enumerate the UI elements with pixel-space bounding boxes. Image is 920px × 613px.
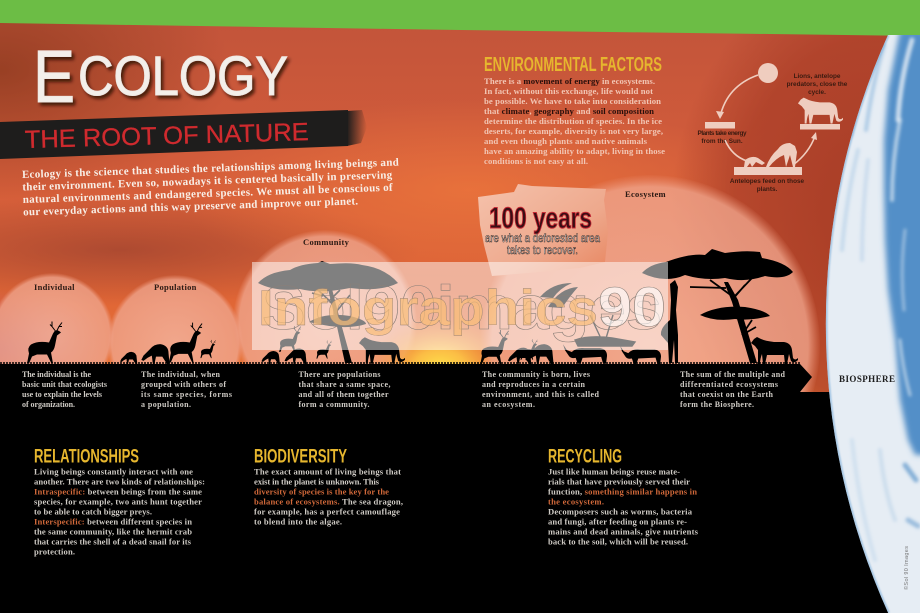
- population text: its same species, forms: [141, 390, 232, 399]
- caption: predators: cycle.: [808, 89, 826, 96]
- subtitle brush band: [0, 110, 367, 159]
- arrow: antelopes to predators: [793, 132, 817, 165]
- biosphere text: The sum of the multiple and: [680, 370, 786, 379]
- relationships text: protection.: [34, 546, 75, 556]
- recycling text: rials that have previously served their: [548, 476, 690, 486]
- image credit: ©Sol 90 Images: [903, 546, 910, 590]
- relationships text: species, for example, two ants hunt together: [34, 496, 202, 506]
- subtitle: THE ROOT OF NATURE: [24, 118, 309, 154]
- environmental factors text: deserts, for example, diversity is not very large,: [484, 126, 663, 136]
- recycling text: Just like human beings reuse mate-: [548, 466, 680, 476]
- individual text: The individual is the: [22, 370, 91, 379]
- biodiversity text: The exact amount of living beings that: [254, 466, 401, 476]
- individual label: Individual: [34, 282, 75, 292]
- recycling text: mains and dead animals, give nutrients: [548, 526, 699, 536]
- intro paragraph: their environment. Even so, nowadays it is centered basically in preserving: [22, 169, 393, 193]
- population text: a population.: [141, 400, 191, 409]
- recycling section: [548, 446, 699, 546]
- population text: [141, 370, 232, 409]
- ocean: [884, 30, 920, 455]
- title: E: [33, 35, 75, 118]
- environmental factors text: that climate, geography and soil composition: [484, 106, 654, 116]
- relationships text: Intraspecific: between beings from the same: [34, 486, 202, 496]
- intro paragraph: [22, 157, 400, 218]
- biodiversity text: balance of ecosystems. The sea dragon,: [254, 496, 403, 506]
- callout: 100 years note: [478, 184, 608, 276]
- individual text: [22, 370, 107, 409]
- arrow: plants to antelopes: [725, 140, 747, 161]
- relationships section: [34, 446, 205, 556]
- recycling text: back to the soil, which will be reused.: [548, 536, 688, 546]
- callout text: [485, 231, 600, 257]
- environmental factors text: have an amazing ability to adapt, living in those: [484, 146, 665, 156]
- silhouettes: individual deer: [27, 322, 62, 364]
- environmental factors text: be possible. We have to take into consideration: [484, 96, 661, 106]
- caption: plants: Plants take energy: [698, 130, 747, 137]
- cloud streaks: [842, 40, 918, 560]
- heading: environmental factors: ENVIRONMENTAL FACTORS: [484, 54, 662, 76]
- silhouette: giraffe: [661, 280, 678, 363]
- earth: [820, 30, 920, 613]
- intro paragraph: natural environments and endangered species. We must all be conscious of: [23, 182, 393, 206]
- sky shading: [0, 0, 920, 480]
- heading: recycling: RECYCLING: [548, 446, 622, 468]
- watermark: Sol90images: [262, 274, 662, 343]
- callout text: are what a deforested area: [485, 231, 600, 245]
- recycling text: [548, 466, 699, 546]
- relationships text: another. There are two kinds of relationships:: [34, 476, 205, 486]
- community text: [298, 370, 390, 409]
- biodiversity section: [254, 446, 403, 526]
- ecosystem label: Ecosystem: [625, 189, 666, 199]
- relationships text: Interspecific: between different species in: [34, 516, 192, 526]
- biodiversity text: [254, 466, 403, 526]
- recycling text: the ecosystem.: [548, 496, 604, 506]
- silhouettes: population: [120, 323, 216, 364]
- community text: and all of them together: [298, 390, 389, 399]
- biosphere text: [680, 370, 786, 409]
- callout text: takes to recover.: [507, 243, 578, 257]
- environmental factors panel: [484, 54, 665, 166]
- ecosystem text: [482, 370, 600, 409]
- relationships text: [34, 466, 205, 556]
- energy cycle diagram: [698, 63, 848, 193]
- community label: Community: [303, 237, 350, 247]
- individual text: use to explain the levels: [22, 390, 102, 399]
- biosphere label: BIOSPHERE: [839, 374, 895, 384]
- caption: predators: predators, close the: [787, 81, 848, 88]
- biodiversity text: exist in the planet is unknown. This: [254, 476, 380, 486]
- caption: predators: Lions, antelope: [794, 73, 841, 80]
- callout number: 100 years: [489, 202, 592, 235]
- biodiversity text: diversity of species is the key for the: [254, 486, 389, 496]
- ecosystem text: The community is born, lives: [482, 370, 590, 379]
- arrow: sun to plants: [716, 75, 758, 119]
- environmental factors text: conditions is not easy at all.: [484, 156, 588, 166]
- ecosystem text: an ecosystem.: [482, 400, 535, 409]
- population label: Population: [154, 282, 197, 292]
- community text: that share a same space,: [298, 380, 390, 389]
- intro paragraph: Ecology is the science that studies the relationships among living beings and: [22, 157, 399, 181]
- biosphere text: that coexist on the Earth: [680, 390, 774, 399]
- biodiversity text: to blend into the algae.: [254, 516, 342, 526]
- biosphere text: differentiated ecosystems: [680, 380, 778, 389]
- icon: cheetah on plate: [798, 98, 843, 130]
- environmental factors text: and even though plants and native animals: [484, 136, 648, 146]
- green top band: [0, 0, 920, 36]
- caption: plants: from the Sun.: [701, 138, 743, 145]
- atmosphere rim: [826, 35, 888, 613]
- environmental factors text: There is a movement of energy in ecosystems.: [484, 76, 655, 86]
- population text: The individual, when: [141, 370, 221, 379]
- circle: individual: [0, 273, 114, 397]
- ecosystem text: environment, and this is called: [482, 390, 600, 399]
- relationships text: that carries the shell of a dead snail for its: [34, 536, 192, 546]
- title: COLOGY: [78, 44, 288, 107]
- sky background: [0, 0, 920, 400]
- icon: sun: [758, 63, 778, 83]
- plate: plants: [705, 122, 735, 128]
- biosphere text: form the Biosphere.: [680, 400, 754, 409]
- environmental factors text: determine the distribution of species. In the ice: [484, 116, 662, 126]
- biodiversity text: for example, has a perfect camouflage: [254, 506, 400, 516]
- silhouette: acacia tree: [642, 249, 793, 363]
- recycling text: and fungi, after feeding on plants re-: [548, 516, 687, 526]
- icon: antelopes on plate: [734, 143, 802, 175]
- circle: community: [233, 230, 417, 414]
- watermark: Infographics: [258, 280, 598, 336]
- ecosystem text: and reproduces in a certain: [482, 380, 586, 389]
- recycling text: function, something similar happens in: [548, 486, 697, 496]
- individual text: basic unit that ecologists: [22, 380, 107, 389]
- title: [33, 35, 288, 118]
- circle: ecosystem: [480, 175, 820, 515]
- individual text: of organization.: [22, 400, 75, 409]
- community text: form a community.: [298, 400, 370, 409]
- circle: population: [107, 275, 243, 411]
- rising sun glow: [365, 316, 515, 420]
- silhouette: cheetah: [751, 337, 798, 364]
- caption: antelopes: plants.: [757, 186, 778, 193]
- environmental factors text: In fact, without this exchange, life would not: [484, 86, 653, 96]
- community text: There are populations: [298, 370, 380, 379]
- heading: biodiversity: BIODIVERSITY: [254, 446, 347, 468]
- black ground: [0, 363, 840, 613]
- relationships text: the same community, like the hermit crab: [34, 526, 192, 536]
- relationships text: to be able to catch bigger preys.: [34, 506, 152, 516]
- intro paragraph: our everyday actions and this way preserve and improve our planet.: [23, 195, 358, 218]
- caption: antelopes: Antelopes feed on those: [730, 178, 805, 185]
- recycling text: Decomposers such as worms, bacteria: [548, 506, 693, 516]
- relationships text: Living beings constantly interact with one: [34, 466, 193, 476]
- silhouettes: ecosystem animals: [480, 283, 661, 364]
- silhouettes: community: [258, 261, 405, 364]
- watermark: 90: [598, 275, 666, 338]
- environmental factors text: [484, 76, 665, 166]
- heading: relationships: RELATIONSHIPS: [34, 446, 139, 468]
- population text: grouped with others of: [141, 380, 226, 389]
